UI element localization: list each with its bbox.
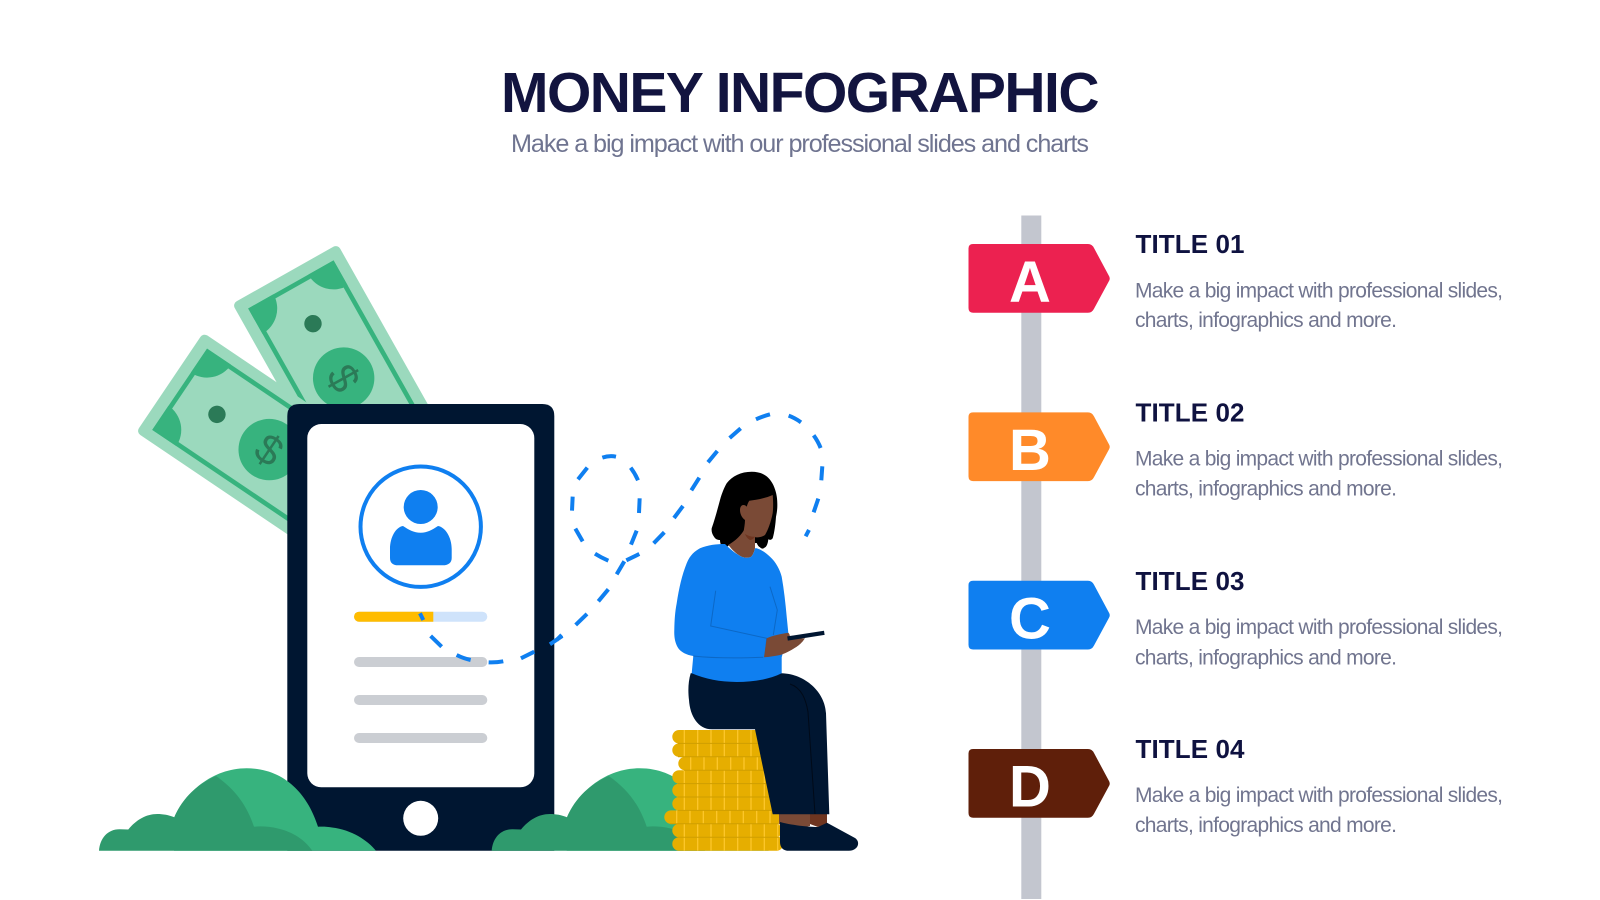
title: MONEY INFOGRAPHIC <box>501 61 1100 125</box>
illustration <box>99 244 858 851</box>
trousers <box>688 670 829 814</box>
letter C: C <box>1009 586 1051 651</box>
sweater fold lines <box>693 587 777 658</box>
icon: back banknote: $ <box>317 356 370 400</box>
description 03: Make a big impact with professional slides, <box>1135 616 1503 639</box>
description 02: Make a big impact with professional slides, <box>1135 448 1503 471</box>
icon: front banknote <box>136 333 399 564</box>
bush left <box>99 768 376 851</box>
trouser crease <box>790 684 815 814</box>
forearm and hand <box>764 633 805 657</box>
shoe <box>780 822 858 851</box>
letter A: A <box>1009 250 1051 315</box>
handheld phone <box>788 633 824 638</box>
item A <box>968 229 1503 332</box>
sweater <box>674 544 788 682</box>
title 04: TITLE 04 <box>1136 734 1245 764</box>
dashed flight path <box>420 414 822 662</box>
badge C <box>968 581 1110 650</box>
title 03: TITLE 03 <box>1136 566 1244 596</box>
chin shadow <box>745 534 755 540</box>
hair <box>712 472 777 549</box>
person sitting with phone <box>674 472 858 851</box>
icon: front banknote: $ <box>246 424 292 476</box>
placeholder text lines <box>354 657 487 743</box>
description 04 <box>1135 784 1503 837</box>
badge B <box>968 412 1110 481</box>
progress bar <box>354 612 487 622</box>
smartphone <box>287 404 554 851</box>
item B <box>968 398 1503 501</box>
letter B: B <box>1009 418 1051 483</box>
neck <box>728 528 755 558</box>
description 01: charts, infographics and more. <box>1135 309 1397 332</box>
subtitle: Make a big impact with our professional slides and charts <box>511 130 1089 158</box>
title 01: TITLE 01 <box>1136 229 1244 259</box>
item C <box>968 566 1503 670</box>
description 04: Make a big impact with professional slides, <box>1135 784 1503 807</box>
bush right <box>492 768 769 851</box>
item D <box>968 734 1503 837</box>
icon: back banknote <box>232 244 454 509</box>
description 03 <box>1135 616 1503 670</box>
badge D <box>968 749 1110 818</box>
description 03: charts, infographics and more. <box>1135 646 1397 670</box>
ankles <box>779 812 810 827</box>
timeline bar <box>1021 216 1041 899</box>
description 01 <box>1135 279 1503 332</box>
badge A <box>968 244 1110 313</box>
description 01: Make a big impact with professional slides, <box>1135 279 1503 302</box>
letter D: D <box>1009 754 1051 820</box>
icon: user avatar <box>360 466 481 587</box>
description 02 <box>1135 448 1503 501</box>
coin stack <box>664 730 783 851</box>
description 04: charts, infographics and more. <box>1135 814 1397 837</box>
title 02: TITLE 02 <box>1136 398 1244 428</box>
face <box>740 495 773 537</box>
description 02: charts, infographics and more. <box>1135 478 1397 501</box>
